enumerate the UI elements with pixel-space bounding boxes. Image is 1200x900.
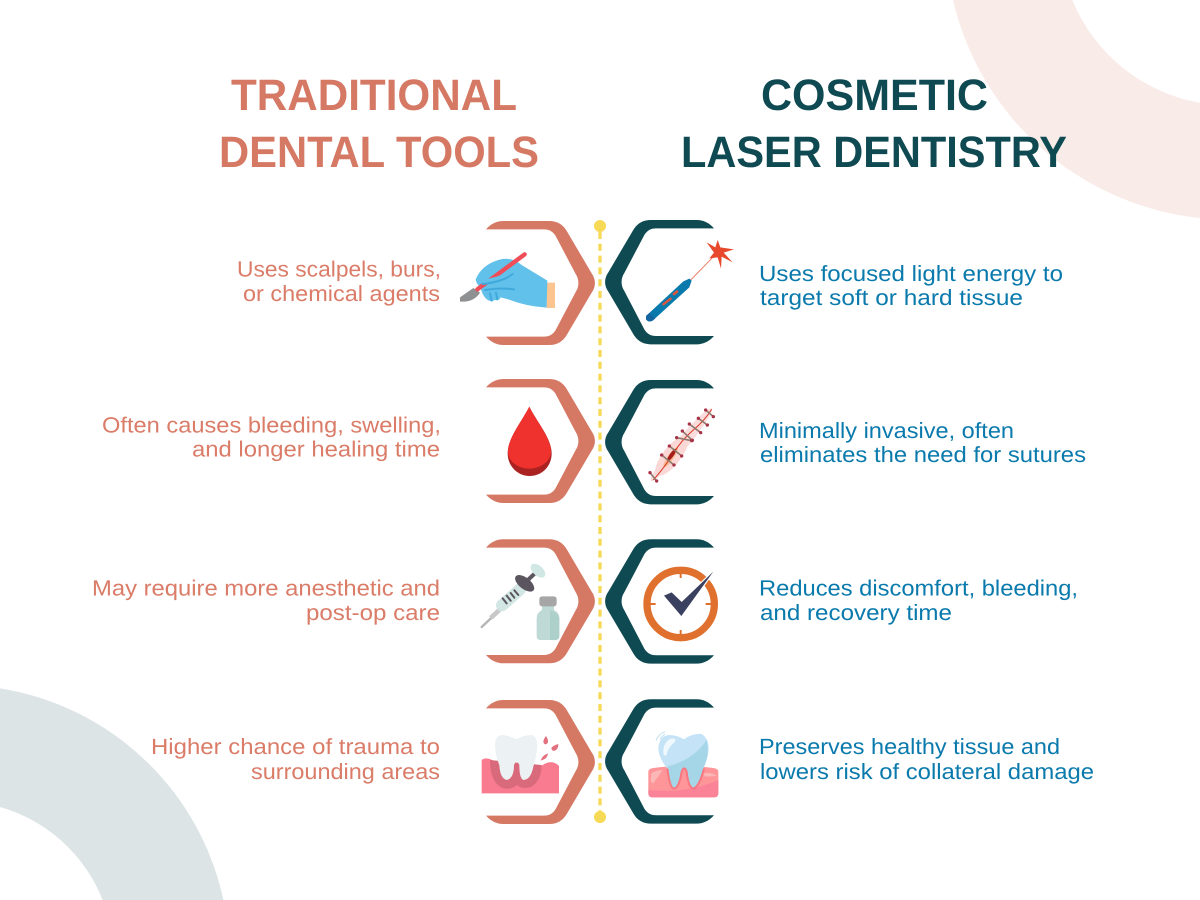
heading: traditional dental tools: TRADITIONAL: [231, 71, 517, 120]
right chevron row 2: [605, 380, 714, 504]
right chevron row 1: [605, 220, 714, 344]
text: traditional row 3: post-op care: [306, 600, 440, 625]
heading: cosmetic laser dentistry: COSMETIC: [761, 71, 988, 120]
icon: clock with check mark: [647, 570, 714, 638]
left chevron row 4: [486, 700, 595, 824]
icon: sutured wound: [646, 405, 716, 485]
text: laser row 4: Preserves healthy tissue and: [759, 734, 1060, 759]
text: laser row 4: [759, 734, 1094, 784]
text: laser row 1: Uses focused light energy to: [759, 261, 1063, 286]
text: traditional row 2: and longer healing time: [192, 437, 440, 462]
left chevron row 2: [486, 379, 595, 503]
left chevron row 1: [486, 221, 595, 345]
right chevron row 4: [605, 699, 714, 824]
heading: traditional dental tools: [219, 71, 539, 177]
icon: laser pen with spark: [646, 240, 734, 321]
text: traditional row 1: Uses scalpels, burs,: [237, 257, 441, 282]
text: laser row 3: Reduces discomfort, bleeding,: [759, 576, 1078, 601]
icon: healthy tooth in gum: [648, 732, 718, 797]
icon: gloved hand holding scalpel: [460, 254, 555, 308]
decorative ring: bottom left: [0, 688, 223, 900]
heading: cosmetic laser dentistry: [681, 71, 1067, 177]
text: traditional row 3: May require more anesthetic and: [92, 576, 440, 601]
text: laser row 4: lowers risk of collateral damage: [760, 759, 1094, 784]
icon: damaged tooth in gum: [482, 735, 559, 793]
text: laser row 1: target soft or hard tissue: [760, 285, 1023, 310]
text: laser row 2: Minimally invasive, often: [759, 418, 1014, 443]
heading: traditional dental tools: DENTAL TOOLS: [219, 128, 539, 177]
text: traditional row 2: Often causes bleeding, swelling,: [102, 412, 441, 437]
right chevron row 3: [605, 539, 714, 664]
text: traditional row 4: surrounding areas: [251, 759, 440, 784]
text: traditional row 1: or chemical agents: [243, 281, 440, 306]
text: traditional row 3: [92, 576, 440, 625]
center dashed divider: [594, 220, 606, 823]
text: laser row 2: [759, 418, 1086, 467]
text: laser row 3: and recovery time: [760, 600, 952, 625]
icon: blood drop: [508, 407, 552, 476]
heading: cosmetic laser dentistry: LASER DENTISTRY: [681, 128, 1067, 177]
left chevron row 3: [486, 539, 595, 663]
text: traditional row 2: [102, 412, 441, 462]
decorative ring: top right: [953, 0, 1200, 218]
text: laser row 3: [759, 576, 1078, 625]
text: laser row 1: [759, 261, 1063, 310]
text: laser row 2: eliminates the need for sutures: [760, 442, 1086, 467]
text: traditional row 1: [237, 257, 441, 306]
text: traditional row 4: [151, 734, 440, 784]
text: traditional row 4: Higher chance of trauma to: [151, 734, 440, 759]
icon: syringe and vial: [482, 561, 559, 640]
